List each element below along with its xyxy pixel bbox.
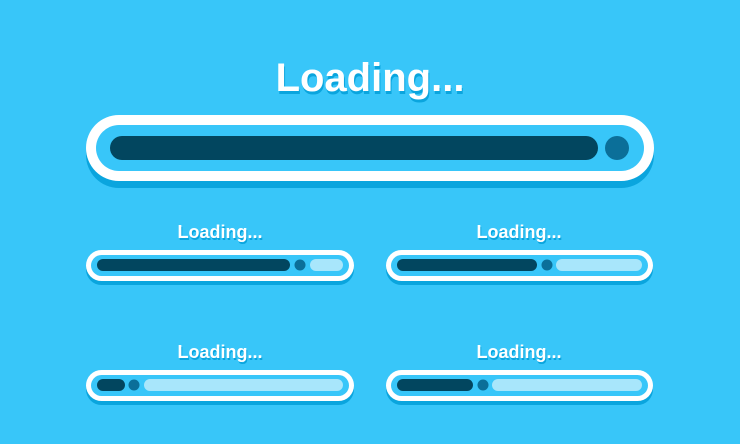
label: bottom-right: Loading... xyxy=(476,342,562,362)
label: top-left: Loading... xyxy=(178,222,262,242)
main progress bar xyxy=(86,115,654,188)
bar: top-right xyxy=(386,250,653,285)
label: top-right: Loading... xyxy=(478,224,562,244)
label: bottom-left: Loading... xyxy=(178,342,262,362)
title: Loading... xyxy=(276,56,464,100)
label: bottom-right: Loading... xyxy=(478,344,562,364)
title: Loading... xyxy=(277,59,465,103)
label: bottom-left: Loading... xyxy=(178,344,264,364)
bar: top-left xyxy=(86,250,354,285)
label: top-right: Loading... xyxy=(476,222,562,242)
bar: bottom-right xyxy=(386,370,653,405)
label: top-left: Loading... xyxy=(178,224,264,244)
bar: bottom-left xyxy=(86,370,354,405)
